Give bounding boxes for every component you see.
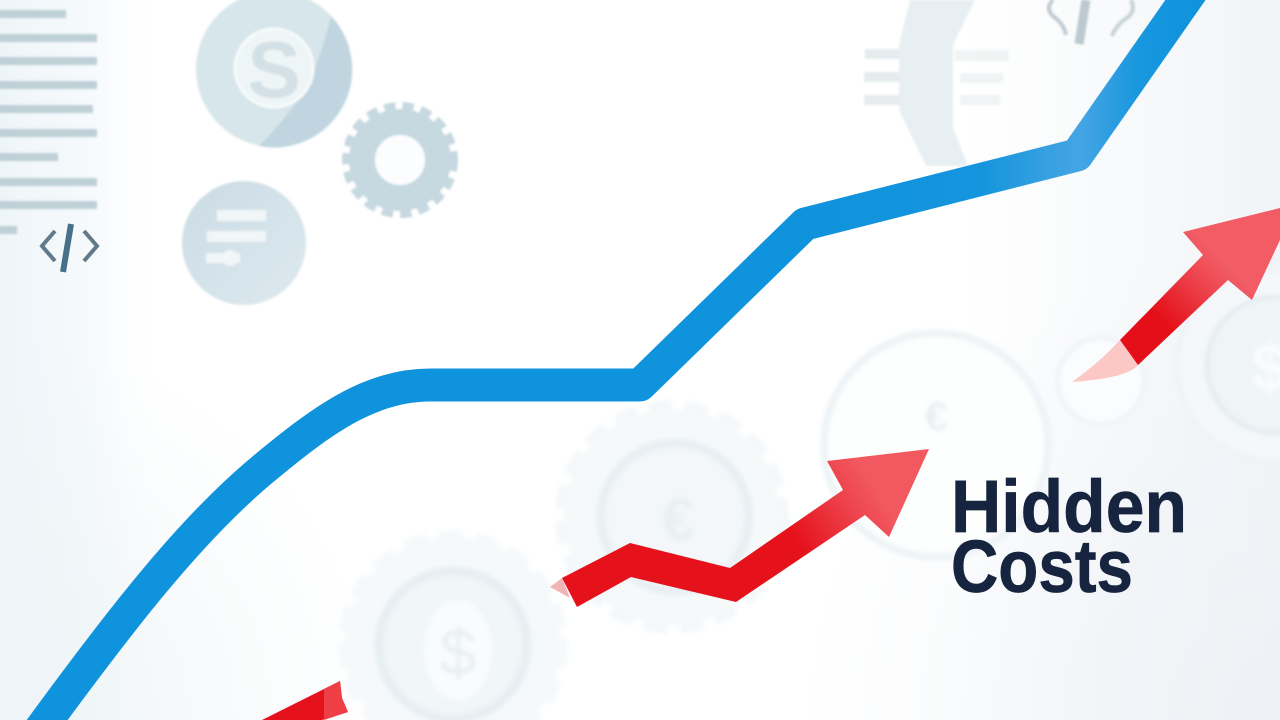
icon: dollar coin: S [247, 25, 301, 114]
icon: faded euro gear: € [661, 486, 695, 553]
icon: code brackets [42, 224, 97, 272]
icon: faded dollar coin at right edge [1177, 270, 1280, 460]
icon: gear [347, 107, 453, 213]
icon: faded euro gear [560, 405, 784, 629]
icon: dollar coin [196, 0, 352, 148]
icon: document text lines [0, 10, 97, 234]
arrow: red upper right arrow [1072, 208, 1280, 382]
title: Hidden Costs: Costs [951, 525, 1133, 608]
icon: list disc [182, 181, 306, 305]
icon: faded dollar gear: $ [440, 615, 476, 689]
icon: faded dollar gear [343, 535, 563, 720]
icon: faded code brackets [1049, 0, 1133, 44]
icon: faded small coin ring [1058, 338, 1144, 424]
arrow: red tail segment bottom left [262, 681, 348, 720]
title: Hidden Costs [951, 465, 1187, 608]
icon: faded euro coin ring [824, 333, 1048, 557]
arrow: red middle arrow [550, 449, 929, 607]
icon: faded euro coin ring: € [925, 395, 947, 439]
icon: faded euro symbol [864, 0, 1009, 166]
title: Hidden Costs: Hidden [951, 465, 1187, 548]
